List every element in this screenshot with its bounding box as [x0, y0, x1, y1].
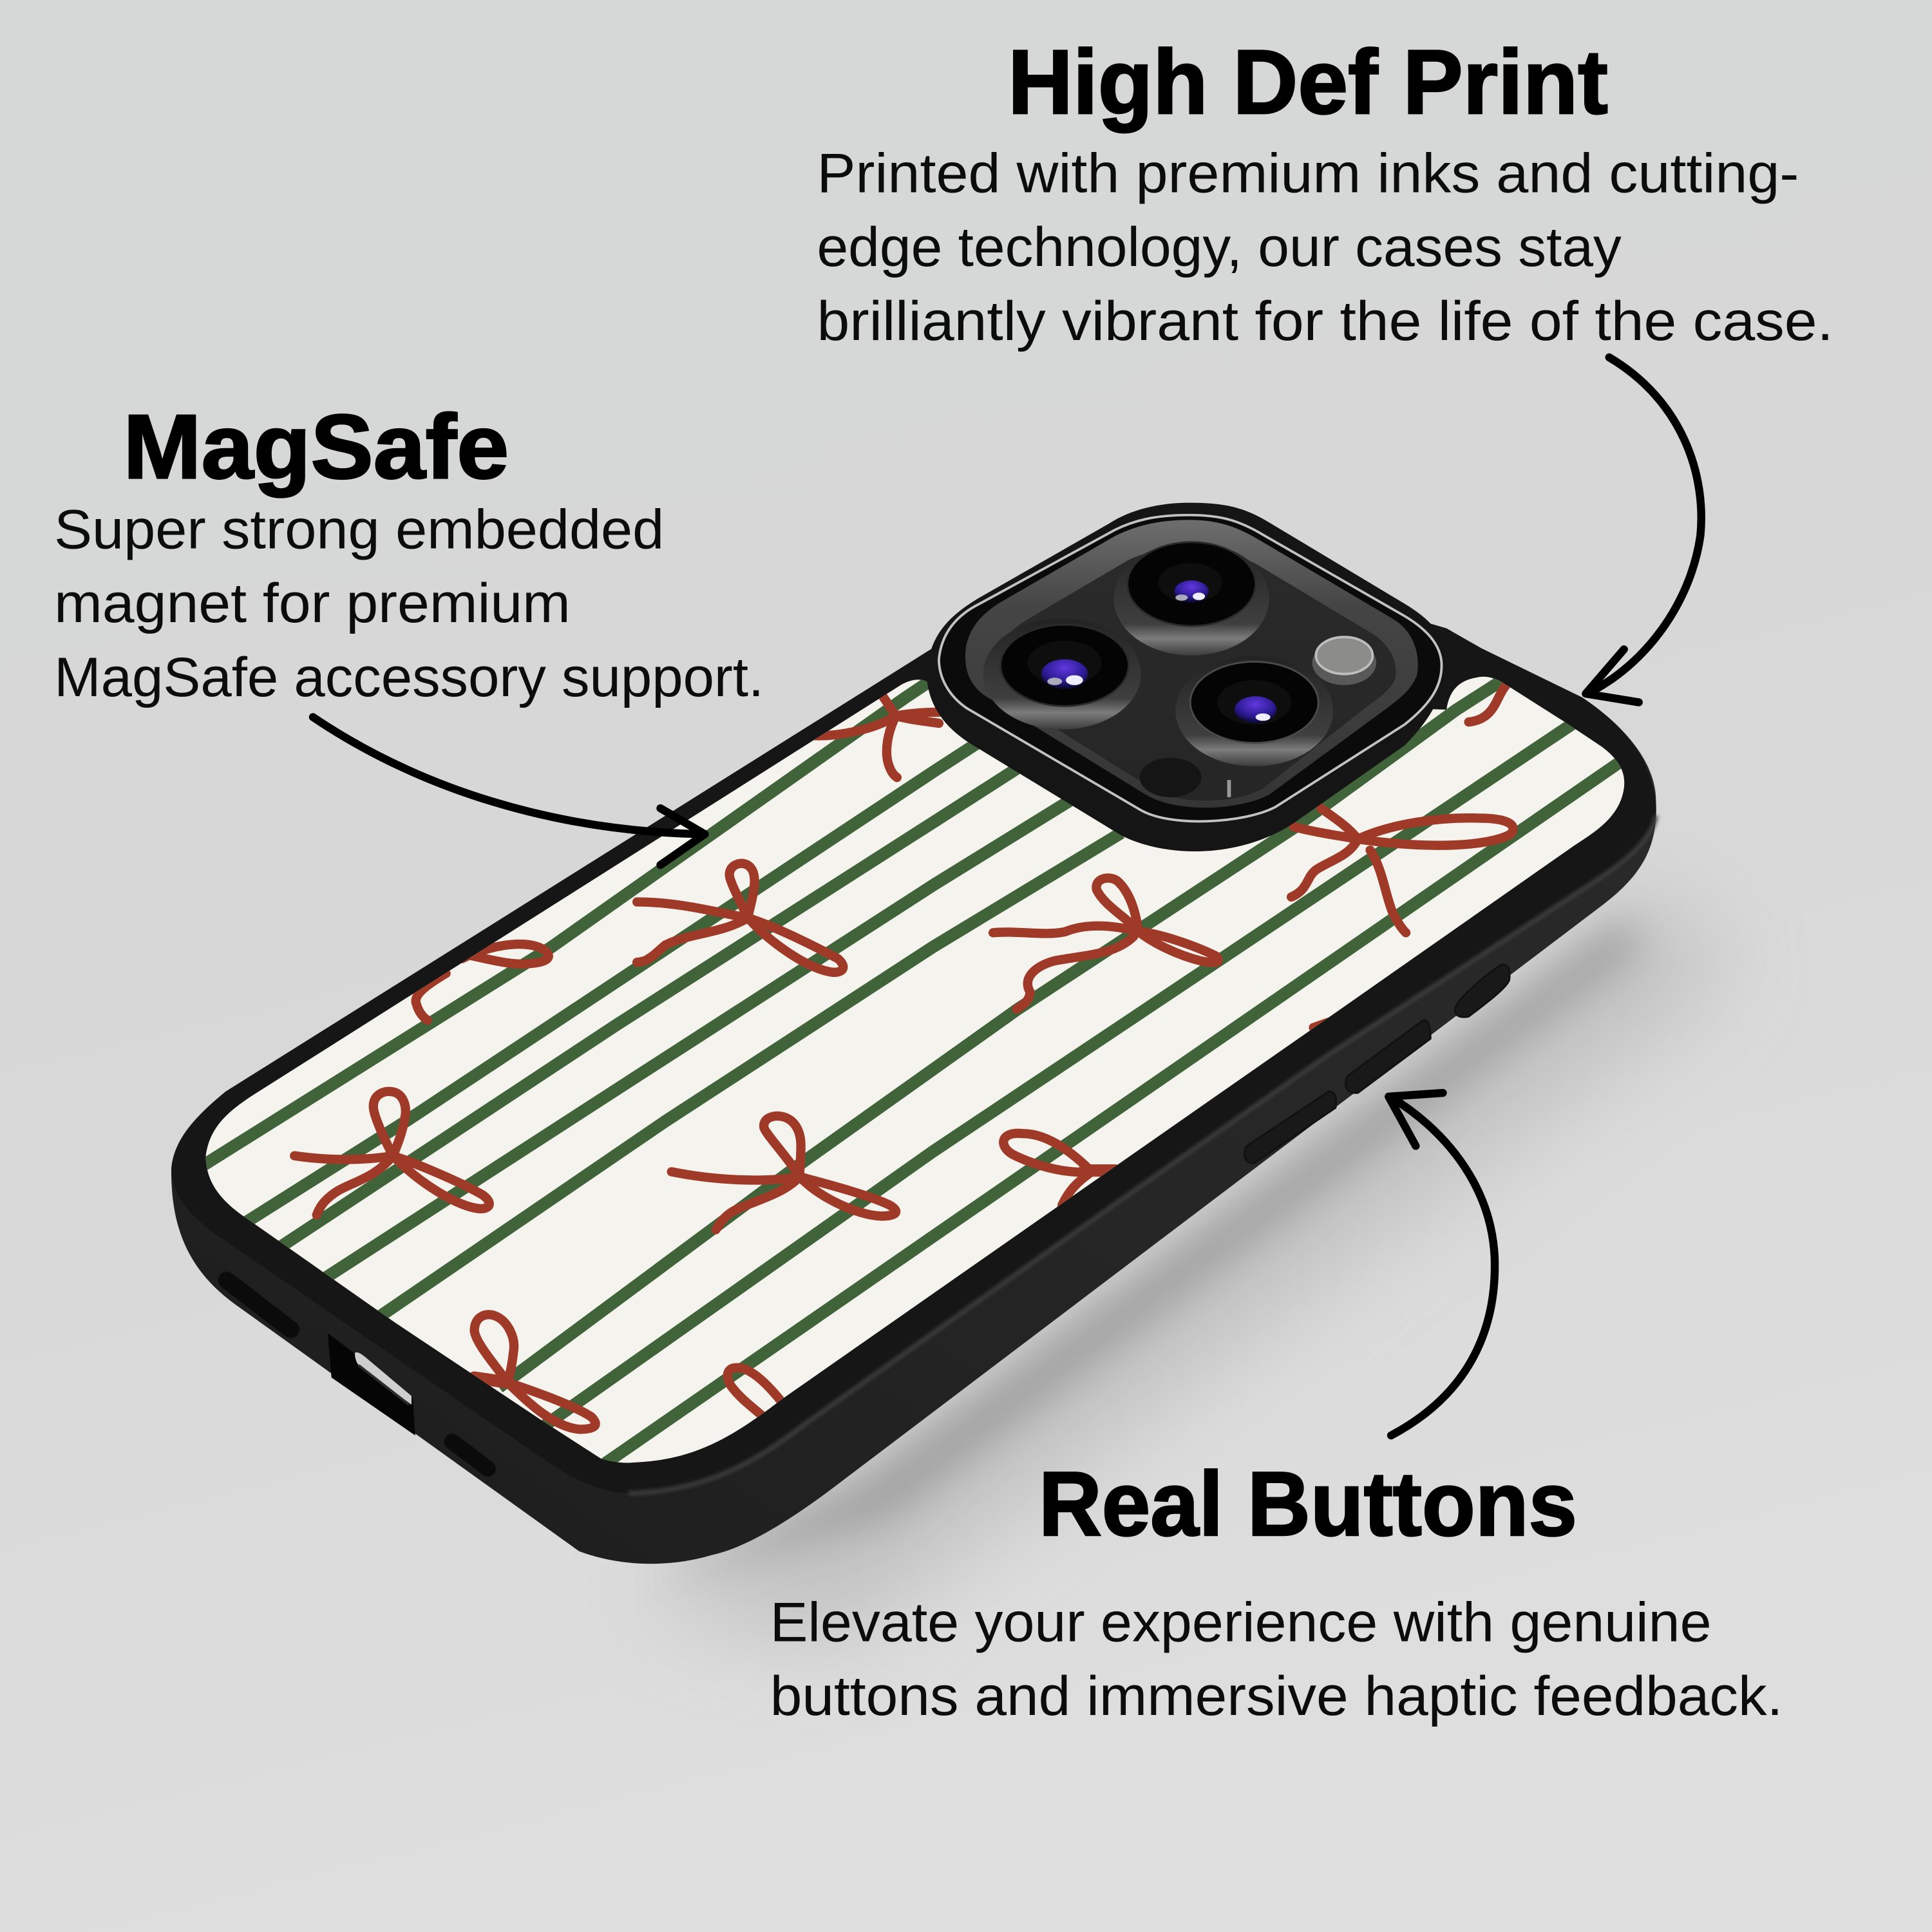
bow: bottom [475, 1314, 596, 1429]
lens top [1114, 542, 1269, 656]
text: magsafe description [54, 498, 764, 708]
lidar sensor [1140, 758, 1201, 797]
flash [1312, 637, 1376, 685]
bow: top left near camera [812, 694, 939, 777]
arrow: real buttons [1388, 1093, 1495, 1435]
glass plate [965, 520, 1418, 808]
case body [171, 554, 1656, 1564]
bow: right middle [993, 878, 1218, 1009]
text: real buttons description [770, 1591, 1783, 1727]
printed back panel [185, 665, 1657, 1491]
bow: small fragment [1314, 1021, 1331, 1028]
text: high def description: edge technology, our cases stay [817, 216, 1622, 278]
microphone [1227, 780, 1231, 797]
lens left [983, 618, 1141, 730]
bow: clipped at bottom edge [728, 1368, 788, 1419]
small port [452, 1442, 488, 1469]
charging port [328, 1333, 415, 1435]
glass inner plate [991, 548, 1396, 800]
phone shadow wide [641, 887, 1725, 1639]
lens right [1175, 656, 1333, 766]
speaker port [227, 1280, 291, 1329]
action button [1455, 965, 1510, 1017]
text: magsafe description: Super strong embedded [54, 498, 664, 560]
upper volume button [1345, 1020, 1430, 1093]
bump silver ring [939, 515, 1442, 821]
green stripes [191, 668, 1657, 1471]
text: real buttons description: Elevate your experience with genuine [770, 1591, 1712, 1653]
phone case [171, 503, 1657, 1564]
heading: Real Buttons: Real Buttons [1039, 1454, 1577, 1555]
text: magsafe description: magnet for premium [54, 573, 571, 634]
arrow: magsafe [313, 717, 705, 865]
bow: top right fragment [1469, 681, 1510, 722]
text: high def description: brilliantly vibrant for the life of the case. [817, 290, 1833, 352]
bow: clipped at side [1003, 1133, 1115, 1205]
heading: MagSafe: MagSafe [123, 396, 509, 498]
red bows [294, 681, 1513, 1429]
cream background [185, 665, 1639, 1491]
heading: High Def Print: High Def Print [1008, 32, 1608, 133]
bump outer frame [927, 503, 1446, 851]
text: real buttons description: buttons and immersive haptic feedback. [770, 1665, 1783, 1727]
bow: clipped at top edge [416, 944, 549, 1020]
bow: center [672, 1116, 896, 1229]
phone shadow tight [653, 918, 1639, 1584]
bow: upper middle [637, 864, 843, 972]
text: high def description: Printed with premium inks and cutting- [817, 142, 1799, 204]
rim crease highlight [629, 816, 1656, 1493]
arrow: high def print [1586, 357, 1701, 703]
bow: corner near camera [1291, 808, 1513, 933]
text: high def description [817, 142, 1833, 352]
lower volume button [1244, 1092, 1336, 1163]
case front rim [171, 554, 1656, 1493]
camera bump [927, 503, 1446, 851]
buttons [1244, 965, 1510, 1163]
text: magsafe description: MagSafe accessory support. [54, 647, 764, 708]
bow: lower left [294, 1092, 489, 1215]
